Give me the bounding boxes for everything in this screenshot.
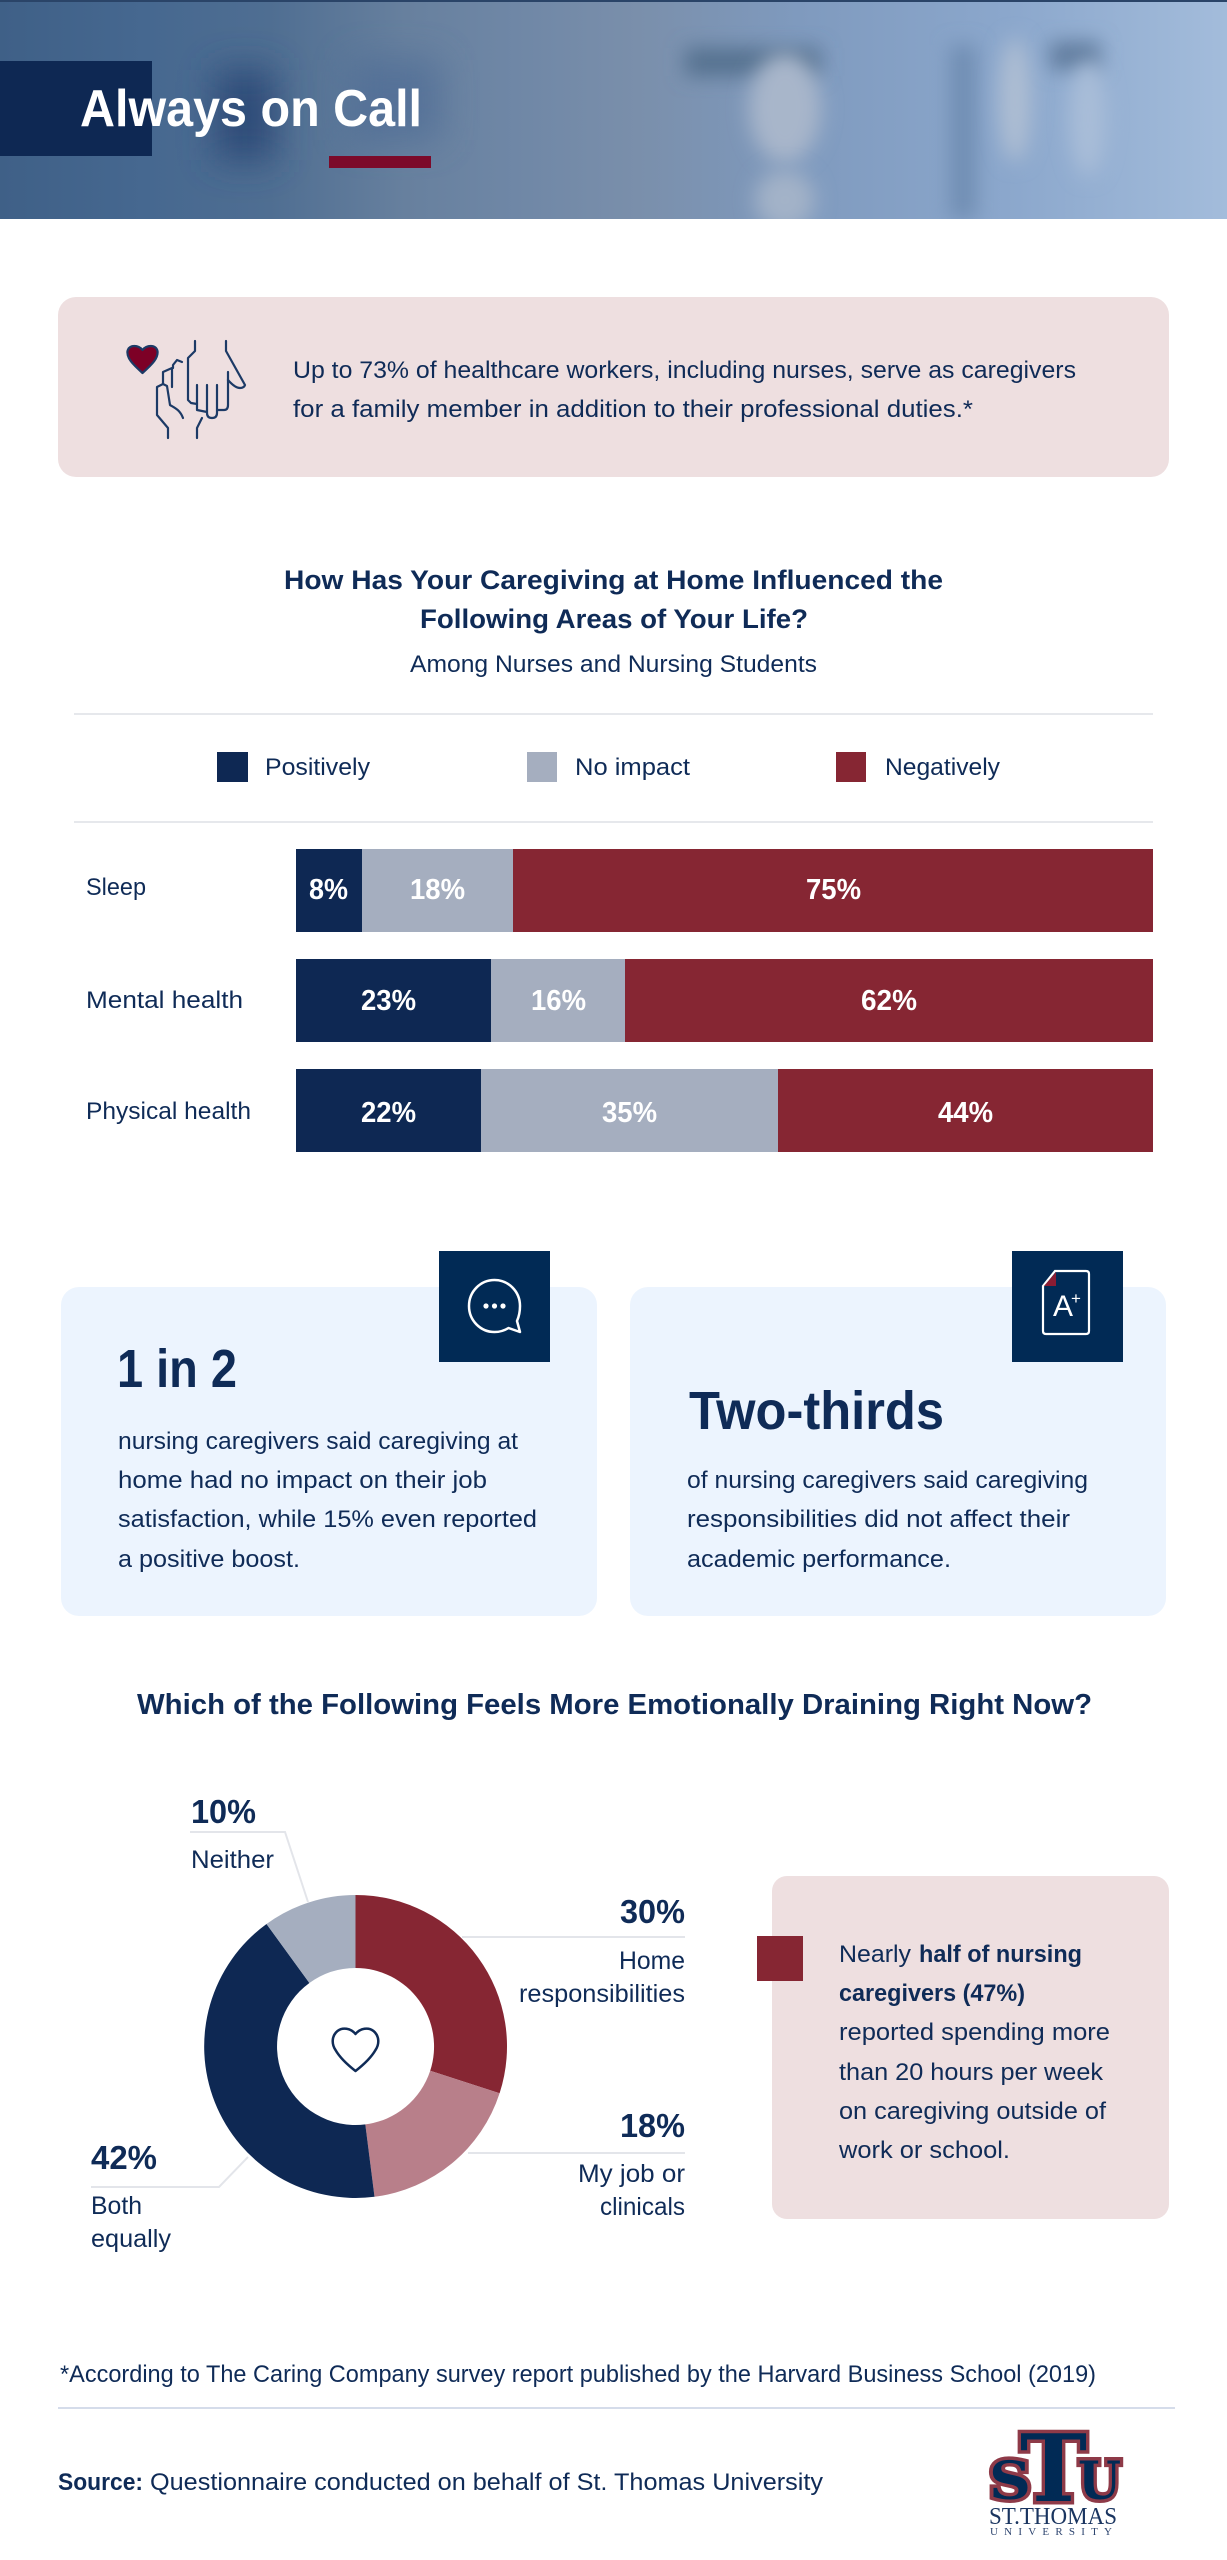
bar: physical health: 22% (361, 1097, 416, 1129)
chart heading: How Has Your Caregiving at Home Influenced the (284, 565, 943, 595)
callout text: half of nursing (919, 1941, 1082, 1968)
bar: sleep (86, 849, 1153, 932)
chart heading: Among Nurses and Nursing Students (410, 651, 817, 678)
slice: both equally (204, 1924, 374, 2198)
bar: mental health: 62% (861, 985, 917, 1017)
icon: heart (333, 2029, 378, 2071)
label: home responsibilities: Home (619, 1947, 685, 1975)
panel: two-thirds stat (630, 1251, 1166, 1616)
panel: 1 in 2 stat (61, 1251, 597, 1616)
label: my job or clinicals: 18% (620, 2107, 685, 2144)
icon: hands and heart (127, 341, 245, 438)
navy title block (0, 61, 152, 156)
stat text (687, 1467, 1088, 1573)
label: both equally: equally (91, 2225, 171, 2253)
stat text: a positive boost. (118, 1546, 300, 1573)
callout text (293, 357, 1076, 423)
callout text: for a family member in addition to their professional duties.* (293, 396, 973, 423)
logo: St. Thomas University: U (1078, 2451, 1121, 2512)
legend (217, 752, 1000, 782)
label: both equally (91, 2139, 171, 2253)
logo: St. Thomas University: T (1020, 2414, 1087, 2523)
slice: my job or clinicals (365, 2071, 500, 2197)
label: neither (191, 1793, 274, 1874)
leader lines (91, 1832, 685, 2187)
icon: graded paper: A (1053, 1290, 1073, 1323)
label: home responsibilities: 30% (620, 1893, 685, 1930)
bar: mental health: 23% (361, 985, 416, 1017)
icon: graded paper: + (1071, 1289, 1081, 1308)
section heading: Which of the Following Feels More Emotionally Draining Right Now? (137, 1689, 1092, 1721)
panel: nearly half callout (757, 1876, 1169, 2219)
logo: St. Thomas University: ST.THOMAS (989, 2504, 1117, 2530)
bar: mental health (86, 959, 1153, 1042)
chart heading (284, 565, 943, 678)
legend: Positively (265, 754, 370, 781)
panel: caregivers callout (58, 297, 1169, 477)
label: both equally: 42% (91, 2139, 157, 2176)
callout text: work or school. (838, 2137, 1010, 2164)
title: Always on Call (80, 80, 422, 138)
bar: sleep: 18% (410, 874, 465, 906)
bar: physical health: 35% (602, 1097, 657, 1129)
label: neither: 10% (191, 1793, 256, 1830)
icon: graded paper (1012, 1251, 1123, 1362)
accent square (757, 1936, 803, 1981)
stat text (118, 1428, 537, 1573)
bar: sleep: Sleep (86, 874, 146, 901)
stat text: satisfaction, while 15% even reported (118, 1506, 537, 1533)
stat text: nursing caregivers said caregiving at (118, 1428, 518, 1455)
label: both equally: Both (91, 2192, 142, 2220)
title accent bar (329, 156, 431, 168)
label: my job or clinicals (578, 2107, 685, 2221)
bar: sleep: 75% (806, 874, 861, 906)
source line: Source: (58, 2469, 143, 2496)
legend: Negatively (885, 754, 1000, 781)
stat text: academic performance. (687, 1546, 951, 1573)
bar: physical health (86, 1069, 1153, 1152)
callout text: caregivers (47%) (839, 1980, 1025, 2007)
slice: neither (266, 1895, 356, 1983)
bar: physical health: Physical health (86, 1098, 251, 1125)
donut chart (91, 1793, 685, 2253)
bar: physical health: 44% (938, 1097, 993, 1129)
logo: St. Thomas University: S (989, 2451, 1031, 2512)
label: my job or clinicals: clinicals (600, 2193, 685, 2221)
stat text: of nursing caregivers said caregiving (687, 1467, 1088, 1494)
source line: Questionnaire conducted on behalf of St. Thomas University (150, 2469, 823, 2496)
slice: home responsibilities (356, 1895, 507, 2093)
chart heading: Following Areas of Your Life? (420, 604, 808, 634)
legend: No impact (575, 754, 690, 781)
stat heading: Two-thirds (689, 1381, 944, 1441)
label: home responsibilities: responsibilities (519, 1980, 685, 2008)
callout text: on caregiving outside of (839, 2098, 1106, 2125)
footnote: *According to The Caring Company survey report published by the Harvard Business School (2019) (60, 2361, 1096, 2388)
callout text: Up to 73% of healthcare workers, including nurses, serve as caregivers (293, 357, 1076, 384)
callout text: Nearly (839, 1941, 911, 1968)
logo: St. Thomas University: UNIVERSITY (990, 2526, 1117, 2538)
stacked bar chart (86, 849, 1153, 1152)
bar: sleep: 8% (309, 874, 348, 906)
label: home responsibilities (519, 1893, 685, 2008)
stat text: responsibilities did not affect their (687, 1506, 1070, 1533)
callout text: reported spending more (839, 2019, 1110, 2046)
icon: chat bubble (439, 1251, 550, 1362)
bar: mental health: Mental health (86, 987, 243, 1014)
callout text (838, 1941, 1110, 2164)
label: my job or clinicals: My job or (578, 2160, 685, 2188)
stat heading: 1 in 2 (117, 1339, 237, 1399)
bar: mental health: 16% (531, 985, 586, 1017)
callout text: than 20 hours per week (839, 2059, 1104, 2086)
label: neither: Neither (191, 1846, 274, 1874)
logo: St. Thomas University (989, 2414, 1121, 2538)
stat text: home had no impact on their job (118, 1467, 487, 1494)
header banner (0, 0, 1227, 230)
